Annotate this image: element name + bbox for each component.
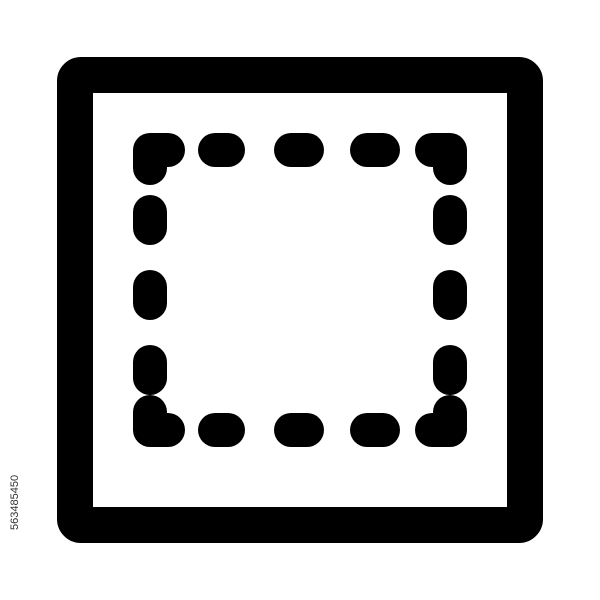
watermark id text: 563485450 <box>9 475 21 530</box>
dashed inner square <box>150 150 450 430</box>
outer square frame <box>75 75 525 525</box>
